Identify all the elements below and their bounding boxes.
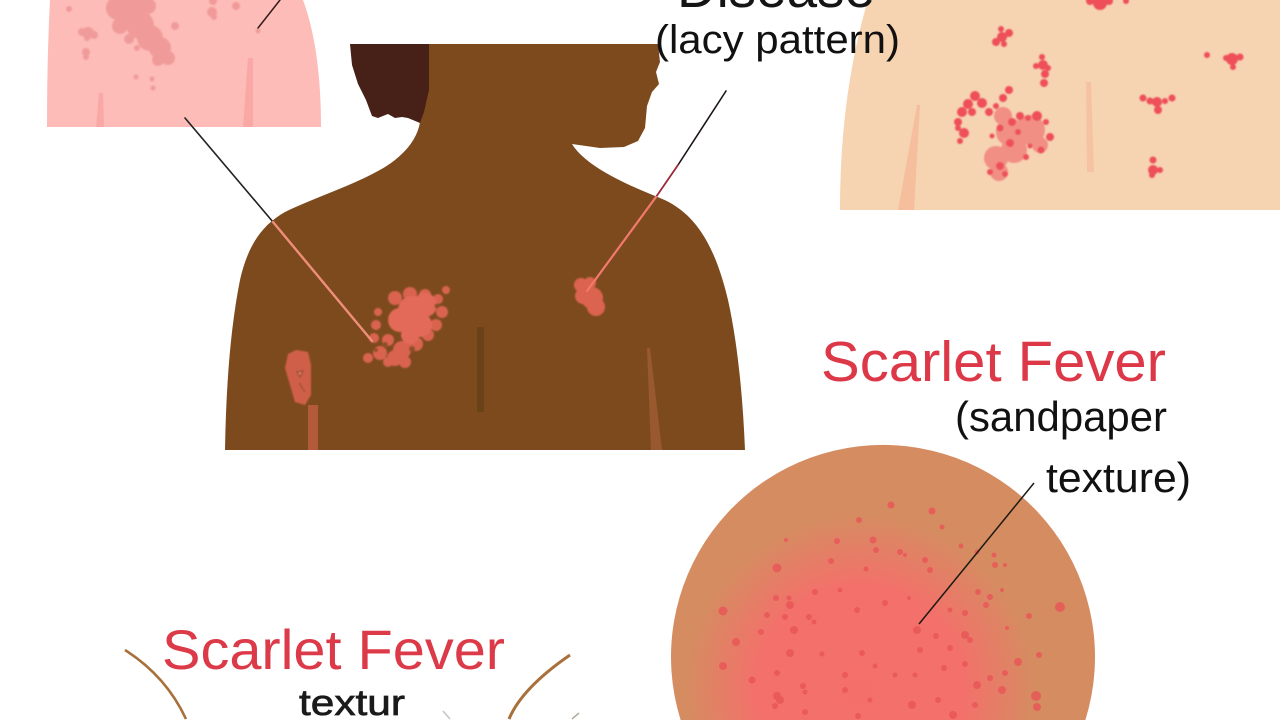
body rash: shoulder patch: [574, 277, 605, 316]
body stripes: [308, 327, 662, 450]
sandpaper spots: [718, 502, 1065, 719]
callout line: texture: [919, 483, 1034, 624]
heading: Scarlet Fever right: Scarlet Fever: [821, 330, 1166, 394]
label: sandpaper: (sandpaper: [955, 393, 1167, 440]
heading: Scarlet Fever bottom left: Scarlet Fever: [162, 618, 505, 681]
panel: cream skin close-up: [840, 0, 1280, 210]
label: lacy pattern: (lacy pattern): [655, 18, 900, 62]
panel: sandpaper texture circle: [671, 445, 1095, 720]
callout line: lacy pattern to shoulder: [587, 91, 726, 291]
label: texture: texture): [1046, 454, 1191, 501]
pink panel rash: [66, 0, 260, 90]
body rash: chest patch: [363, 286, 450, 368]
icon: curved hair lines at bottom: [125, 650, 579, 719]
hair: [350, 44, 429, 123]
callout lines: left pink panel to chest: [185, 0, 372, 341]
cream panel rash: [954, 0, 1244, 181]
figure: brown shoulders silhouette: [225, 44, 745, 450]
body rash: arm patch: [285, 350, 311, 405]
panel: pink skin close-up: [47, 0, 321, 127]
